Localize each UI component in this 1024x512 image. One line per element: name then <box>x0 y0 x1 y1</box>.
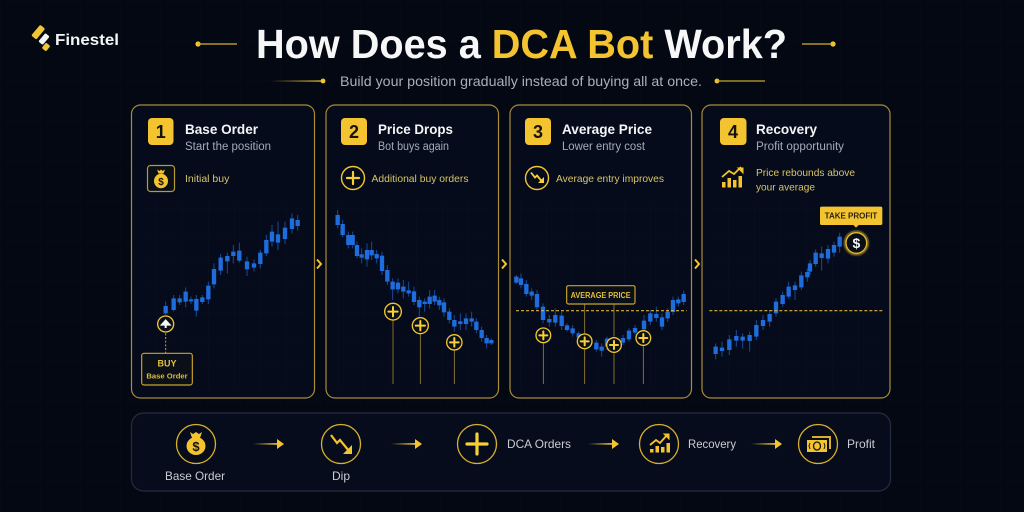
step 4 heading: Recovery <box>756 121 817 137</box>
step 3 note: Average entry improves <box>556 173 664 185</box>
step 4 badge: 4 <box>728 122 738 142</box>
step 1 subheading: Start the position <box>185 141 271 153</box>
step 2 badge: 2 <box>349 122 359 142</box>
buy marker <box>636 331 651 345</box>
buy marker <box>158 316 174 332</box>
buy marker <box>412 318 428 334</box>
step 3 badge: 3 <box>533 122 543 142</box>
flow label: base order: Base Order <box>165 469 225 483</box>
take profit label: TAKE PROFIT <box>825 212 877 221</box>
icon: money bag: $ <box>158 177 164 188</box>
arrow: step 2 to 3 <box>502 260 506 268</box>
flow icon: base order <box>176 424 216 464</box>
arrow: step 1 to 2 <box>317 260 321 268</box>
flow arrow <box>751 439 782 449</box>
chart: V-shaped candles with average line <box>516 273 687 384</box>
chart: falling candles with buy markers <box>338 210 491 384</box>
title decoration left <box>195 41 237 47</box>
panel: step 1 base order <box>132 105 314 398</box>
step 1 heading: Base Order <box>185 121 259 137</box>
arrow: step 3 to 4 <box>695 260 699 268</box>
panel: bottom flow <box>132 413 890 491</box>
subtitle decoration right <box>715 79 765 83</box>
panel: step 4 recovery <box>702 105 890 398</box>
flow label: recovery: Recovery <box>688 437 736 451</box>
step 2 badge <box>341 118 367 145</box>
title: How Does a DCA Bot Work? <box>256 21 787 67</box>
buy label <box>142 353 192 385</box>
panel: step 3 average price <box>510 105 692 398</box>
flow arrow <box>253 439 284 449</box>
step 2 heading: Price Drops <box>378 121 453 137</box>
flow icon: base order: $ <box>192 439 200 454</box>
step 1 badge <box>148 118 174 145</box>
flow label: profit: Profit <box>847 437 876 451</box>
step 4 badge <box>720 118 746 145</box>
step 2 subheading: Bot buys again <box>378 141 449 153</box>
step 2 note: Additional buy orders <box>372 173 468 185</box>
step 3 heading: Average Price <box>562 121 652 137</box>
flow icon: dip <box>322 424 360 464</box>
icon: money bag <box>148 166 174 192</box>
title decoration right <box>802 41 836 47</box>
icon: falling trend <box>526 166 548 190</box>
flow icon: DCA plus <box>458 424 496 464</box>
step 3 subheading: Lower entry cost <box>562 141 646 153</box>
flow label: DCA orders: DCA Orders <box>507 437 571 451</box>
buy marker <box>577 334 592 349</box>
logo: Finestel <box>31 25 119 51</box>
flow icon: profit <box>798 424 838 464</box>
buy marker <box>447 335 462 350</box>
buy marker <box>607 338 621 352</box>
subtitle decoration left <box>270 79 325 83</box>
average price label: AVERAGE PRICE <box>571 291 631 300</box>
buy label: Base Order <box>146 372 188 381</box>
chart: rising candles with buy marker <box>142 213 298 385</box>
profit marker: $ <box>852 235 860 251</box>
icon: plus circle <box>342 166 364 190</box>
average price label <box>567 286 635 304</box>
chart: recovery candles with profit marker <box>709 207 884 359</box>
step 4 note: Price rebounds above <box>756 167 855 179</box>
step 3 badge <box>525 118 551 145</box>
panel: step 2 price drops <box>326 105 498 398</box>
profit marker <box>845 232 868 254</box>
step 4 subheading: Profit opportunity <box>756 141 844 153</box>
buy marker <box>536 328 551 343</box>
step 4 note line 2: your average <box>756 182 815 194</box>
logo: Finestel: Finestel <box>55 32 119 49</box>
step 1 badge: 1 <box>156 122 166 142</box>
take profit label <box>820 207 882 228</box>
icon: rising chart <box>722 167 743 188</box>
flow arrow <box>588 439 619 449</box>
step 1 note: Initial buy <box>185 173 230 185</box>
flow arrow <box>391 439 422 449</box>
buy marker <box>385 303 401 320</box>
buy label: BUY <box>158 359 176 369</box>
flow icon: recovery <box>640 424 678 464</box>
flow label: dip: Dip <box>332 469 350 483</box>
subtitle: Build your position gradually instead of buying all at once. <box>340 73 702 89</box>
